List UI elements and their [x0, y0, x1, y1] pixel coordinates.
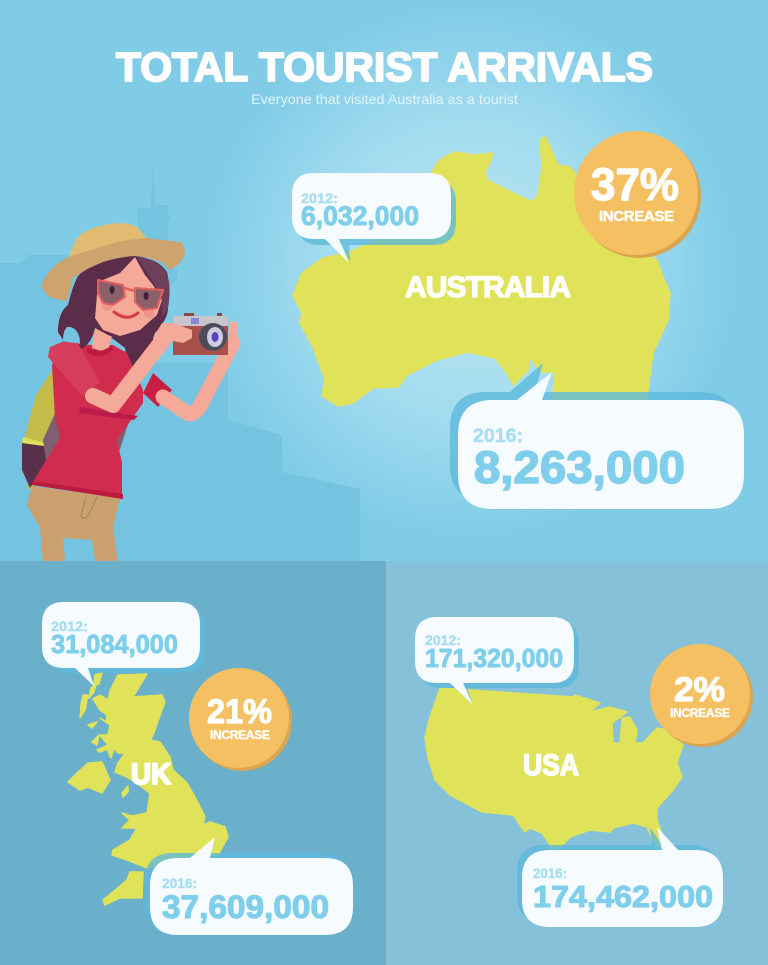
pants	[27, 486, 120, 561]
camera	[173, 313, 228, 355]
2012 label: 2012:	[301, 190, 338, 206]
2012 value: 6,032,000	[301, 201, 419, 231]
collar	[86, 345, 113, 356]
badge: 37% increase	[574, 131, 701, 258]
bubble: 2016 UK	[145, 837, 353, 935]
badge: 21% increase: INCREASE	[210, 728, 270, 742]
right sleeve	[143, 373, 172, 407]
bubble: 2012 USA	[415, 617, 579, 705]
badge: 21% increase	[189, 668, 292, 771]
2012 label: 2012:	[425, 632, 461, 648]
shirt hem	[32, 481, 123, 499]
shirt waist band	[79, 407, 138, 420]
left sleeve upper arm	[48, 342, 100, 397]
2012 value: 31,084,000	[51, 629, 178, 659]
country label: USA: USA	[523, 749, 579, 782]
2012 label: 2012:	[51, 618, 88, 634]
panel: USA	[386, 561, 768, 965]
hat	[42, 223, 185, 301]
blush	[102, 301, 154, 318]
smile	[114, 312, 138, 317]
title: TOTAL TOURIST ARRIVALS	[116, 44, 653, 90]
2016 label: 2016:	[162, 875, 197, 891]
2016 label: 2016:	[533, 865, 567, 881]
backpack	[22, 369, 60, 490]
subtitle: Everyone that visited Australia as a tourist	[251, 92, 518, 107]
right arm	[163, 343, 233, 414]
2016 value: 8,263,000	[474, 442, 685, 493]
panel: UK	[0, 561, 386, 965]
hair back	[108, 332, 155, 375]
bubble: 2012 Australia	[292, 173, 456, 263]
country label: UK: UK	[131, 758, 171, 791]
panel: Australia	[292, 131, 744, 509]
panel: top background	[0, 0, 768, 562]
badge: 2% increase: 2%	[674, 671, 725, 709]
country label: Australia: AUSTRALIA	[405, 271, 571, 304]
2012 value: 171,320,000	[425, 643, 563, 673]
sunglasses	[98, 280, 163, 310]
bubble: 2012 UK	[42, 602, 205, 686]
badge: 21% increase: 21%	[207, 693, 272, 731]
pants drawstring	[81, 497, 97, 518]
2016 label: 2016:	[473, 426, 523, 447]
hair	[58, 256, 170, 353]
badge: 37% increase: 37%	[591, 159, 679, 210]
map: USA	[425, 688, 683, 848]
left hand	[153, 323, 192, 352]
shirt	[32, 342, 143, 499]
map: UK	[68, 673, 228, 905]
straps	[43, 341, 137, 460]
map: Australia	[293, 137, 670, 406]
face	[95, 257, 162, 336]
hair highlight	[137, 257, 169, 318]
badge: 2% increase: INCREASE	[670, 706, 730, 720]
bubble: 2016 Australia	[450, 363, 744, 509]
bubble: 2016 USA	[517, 827, 723, 927]
left arm	[93, 340, 163, 405]
badge: 37% increase: INCREASE	[599, 208, 674, 225]
hand on camera	[228, 321, 238, 352]
2016 value: 174,462,000	[533, 879, 713, 914]
2016 value: 37,609,000	[162, 889, 329, 925]
badge: 2% increase	[650, 644, 753, 747]
illustration: tourist woman with camera	[22, 223, 238, 561]
city skyline silhouette	[0, 160, 360, 562]
neck	[92, 327, 112, 353]
